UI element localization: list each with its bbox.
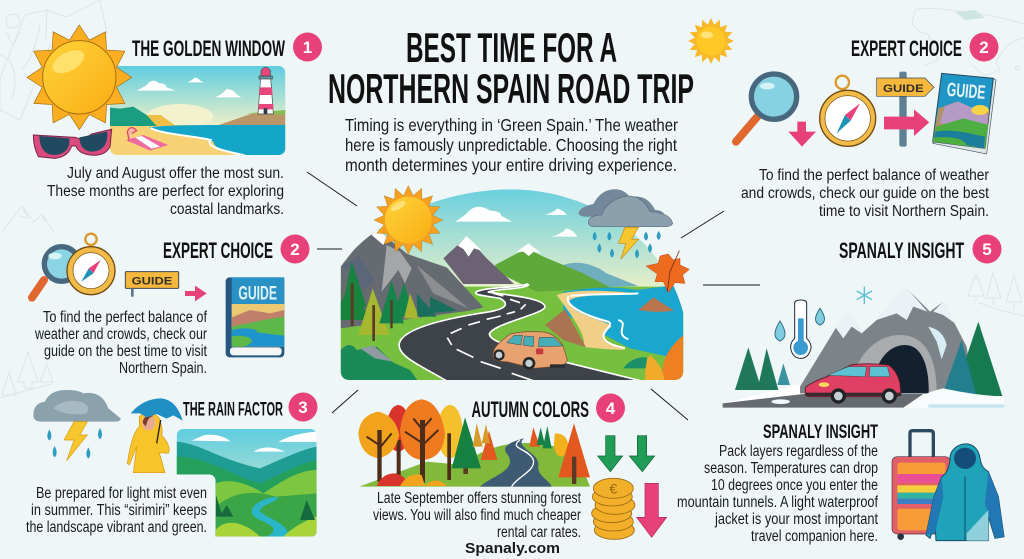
body text: the landscape vibrant and green. xyxy=(26,519,207,536)
heading: expert choice: EXPERT CHOICE xyxy=(163,238,273,263)
body text: mountain tunnels. A light waterproof xyxy=(677,494,879,511)
illustration: autumn forest road xyxy=(358,399,667,539)
body text: travel companion here. xyxy=(751,528,878,545)
badge 1 xyxy=(293,32,322,62)
valley scene xyxy=(177,429,317,537)
illustration: mountain tunnel xyxy=(723,286,1004,408)
body text xyxy=(373,490,582,541)
badge 3 xyxy=(288,392,318,422)
title: NORTHERN SPAIN ROAD TRIP xyxy=(328,65,694,112)
body text: These months are perfect for exploring xyxy=(47,183,284,200)
panel: expert choice right xyxy=(736,32,998,220)
sea and beach xyxy=(563,284,683,360)
badge 5 xyxy=(972,234,1002,264)
badge 1: 1 xyxy=(303,38,312,57)
heading: autumn colors: AUTUMN COLORS xyxy=(472,397,589,422)
pines xyxy=(452,417,481,468)
body text: Late September offers stunning forest xyxy=(377,490,582,507)
storm cloud xyxy=(578,189,673,259)
tree cluster left xyxy=(387,405,410,452)
illustration: autumn forest road: € xyxy=(609,480,617,496)
coins xyxy=(592,478,635,539)
panel: the rain factor xyxy=(26,390,318,537)
icon: small sun xyxy=(688,18,734,64)
panel: the golden window xyxy=(27,25,322,218)
body text: coastal landmarks. xyxy=(170,201,284,218)
clouds xyxy=(455,207,577,237)
badge 4: 4 xyxy=(606,399,616,418)
body text xyxy=(26,485,207,536)
intro text: Timing is everything in ‘Green Spain.’ The weather xyxy=(345,115,678,135)
lighthouse xyxy=(258,78,273,114)
icon: maple leaf xyxy=(646,251,689,293)
illustration: magnifier, compass, signpost and guide: GUIDE xyxy=(946,80,986,104)
decoration: pine trees left xyxy=(0,352,53,398)
decoration: Spain map top right xyxy=(912,8,1024,76)
big mountain xyxy=(341,225,483,328)
body text: and crowds, check our guide on the best xyxy=(741,185,990,202)
body text: To find the perfect balance of xyxy=(43,309,208,326)
panel: autumn colors xyxy=(358,394,667,541)
trees xyxy=(340,262,366,320)
body text: rental car rates. xyxy=(497,524,581,541)
badge 5: 5 xyxy=(982,240,992,259)
body text xyxy=(741,167,990,220)
body text: To find the perfect balance of weather xyxy=(759,167,989,184)
body text: jacket is your most important xyxy=(714,511,879,528)
illustration: storm, raincoat and valley xyxy=(33,390,317,537)
illustration: beach and lighthouse xyxy=(27,25,285,158)
woman in raincoat xyxy=(127,412,169,473)
body text xyxy=(34,309,208,377)
intro text xyxy=(345,115,678,175)
site credit: Spanaly.com xyxy=(465,540,560,557)
badge 2 xyxy=(280,234,310,264)
panel: expert choice left xyxy=(32,234,309,377)
intro text: month determines your entire driving experience. xyxy=(345,155,677,175)
title xyxy=(328,24,694,112)
body text xyxy=(47,165,284,218)
body text: in summer. This “sirimiri” keeps xyxy=(31,502,207,519)
green arrows xyxy=(598,436,655,472)
connector lines xyxy=(307,172,760,420)
illustration: suitcase and jacket xyxy=(892,431,1004,541)
body text: July and August offer the most sun. xyxy=(67,165,284,182)
water drops xyxy=(775,308,824,341)
body text: weather and crowds, check our xyxy=(34,326,207,343)
red car xyxy=(805,364,901,397)
sunglasses xyxy=(33,129,112,158)
pink arrow xyxy=(637,483,667,537)
body text: time to visit Northern Spain. xyxy=(819,203,989,220)
badge 2 xyxy=(970,32,998,62)
decoration: mountains left xyxy=(2,206,54,232)
title: BEST TIME FOR A xyxy=(406,24,617,71)
autumn plants right xyxy=(623,357,647,368)
intro text: here is famously unpredictable. Choosing the right xyxy=(345,135,677,155)
panel: spanaly insight xyxy=(723,234,1004,408)
road xyxy=(399,284,642,381)
badge 3: 3 xyxy=(298,398,308,417)
illustration: magnifier, compass, guide: GUIDE xyxy=(132,275,173,287)
car xyxy=(493,332,567,370)
body text xyxy=(677,443,879,545)
badge 4 xyxy=(596,394,625,422)
badge 2: 2 xyxy=(979,38,989,57)
sun xyxy=(374,186,443,254)
illustration: magnifier, compass, signpost and guide: GUIDE xyxy=(883,83,924,95)
decoration: pine trees right xyxy=(968,273,1024,316)
body text: Be prepared for light mist even xyxy=(36,485,207,502)
central illustration: winding coastal road xyxy=(330,180,697,383)
illustration: magnifier, compass, guide xyxy=(32,234,284,357)
badge 2: 2 xyxy=(290,240,300,259)
heading: the golden window: THE GOLDEN WINDOW xyxy=(132,36,285,61)
body text: views. You will also find much cheaper xyxy=(373,507,581,524)
snowflake xyxy=(857,287,872,304)
panel: spanaly insight details xyxy=(677,421,1004,545)
trees xyxy=(735,347,778,390)
thermometer xyxy=(791,300,811,358)
body text: 10 degrees once you enter the xyxy=(711,477,878,494)
illustration: magnifier, compass, signpost and guide xyxy=(736,72,996,154)
subheading: SPANALY INSIGHT xyxy=(763,421,878,443)
body text: guide on the best time to visit xyxy=(44,343,208,360)
body text: Pack layers regardless of the xyxy=(719,443,878,460)
body text: season. Temperatures can drop xyxy=(704,460,878,477)
heading: the rain factor: THE RAIN FACTOR xyxy=(183,400,283,420)
sun xyxy=(27,25,132,130)
illustration: magnifier, compass, guide: GUIDE xyxy=(238,283,277,304)
decoration: map outline top left xyxy=(0,0,107,120)
body text: Northern Spain. xyxy=(119,360,207,377)
